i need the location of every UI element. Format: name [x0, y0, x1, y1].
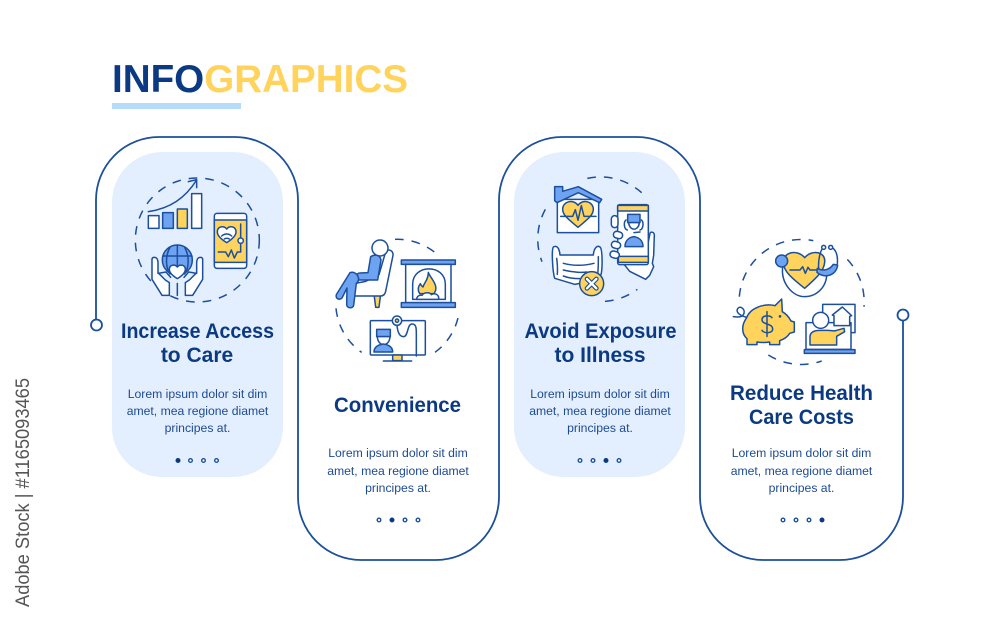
end node	[898, 310, 908, 320]
text: convenience body: principes at.	[365, 481, 431, 495]
text: increase access body: Lorem ipsum dolor sit dim	[128, 387, 267, 401]
progress dots 4	[781, 518, 824, 522]
text: reduce costs body: principes at.	[769, 481, 834, 495]
text: avoid exposure body: Lorem ipsum dolor sit dim	[530, 387, 670, 401]
heading: reduce health care costs: Care Costs	[749, 406, 854, 429]
heading: avoid exposure to illness: to Illness	[554, 344, 646, 367]
heading: reduce health care costs: Reduce Health	[730, 382, 873, 405]
title underline	[112, 103, 241, 109]
icon: reduce costs	[733, 239, 864, 364]
text: reduce costs body: Lorem ipsum dolor sit dim	[732, 446, 871, 460]
heading: increase access to care: to Care	[161, 344, 233, 367]
panel background: avoid exposure to illness	[514, 152, 685, 477]
icon: convenience	[336, 239, 459, 361]
panel background: increase access to care	[112, 152, 283, 477]
text: increase access body: principes at.	[165, 421, 230, 435]
heading: avoid exposure to illness: Avoid Exposure	[524, 320, 676, 343]
icon: avoid exposure	[538, 177, 654, 301]
connecting outline	[96, 137, 903, 560]
text: avoid exposure body: principes at.	[567, 421, 633, 435]
text: reduce costs body: amet, mea regione diamet	[731, 464, 873, 478]
start node	[91, 320, 102, 330]
heading: convenience: Convenience	[334, 394, 461, 417]
icon: access to care	[135, 178, 259, 302]
heading: increase access to care: Increase Access	[121, 320, 274, 343]
text: increase access body: amet, mea regione diamet	[127, 404, 269, 418]
vertical stock id text: Adobe Stock | #1165093465	[13, 378, 34, 607]
title: INFOGRAPHICS	[112, 58, 408, 101]
progress dots 1	[176, 459, 218, 462]
text: avoid exposure body: amet, mea regione diamet	[529, 404, 671, 418]
progress dots 2	[377, 518, 420, 522]
progress dots 3	[578, 459, 621, 462]
text: convenience body: amet, mea regione diamet	[327, 464, 469, 478]
text: convenience body: Lorem ipsum dolor sit dim	[328, 446, 468, 460]
